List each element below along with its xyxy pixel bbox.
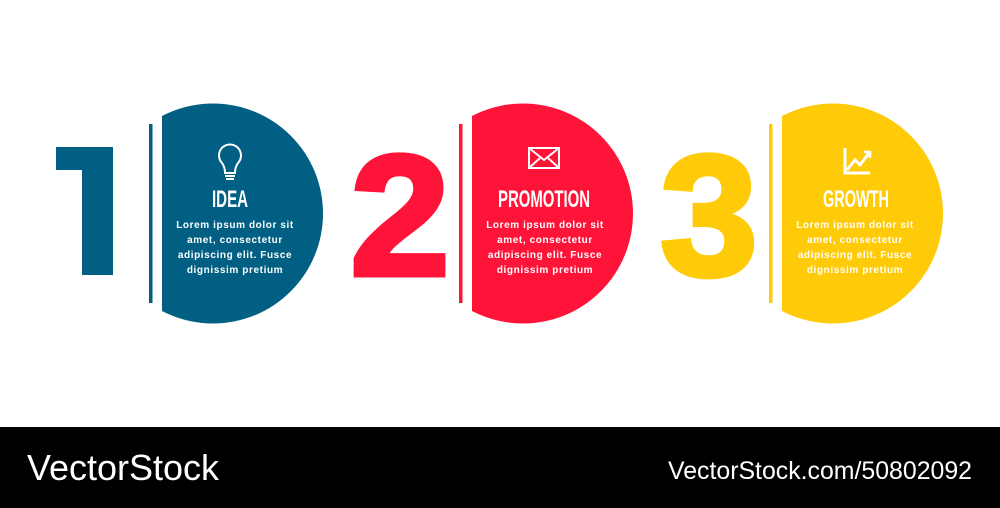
text block 1: Lorem ipsum dolor sit (176, 220, 294, 231)
text block 3: Lorem ipsum dolor sit (796, 220, 914, 231)
text block 1: dignissim pretium (187, 265, 283, 276)
step 2: promotion (350, 104, 633, 324)
circle panel 2 (472, 104, 633, 324)
text block 2: adipiscing elit. Fusce (488, 250, 602, 261)
icon: envelope (529, 148, 559, 168)
footer logo text: VectorStock (27, 447, 220, 488)
circle panel 3 (782, 104, 943, 324)
circle panel 1 (162, 104, 323, 324)
divider bar 3 (769, 124, 772, 303)
step 1: idea (56, 104, 323, 324)
number 3: 3 (660, 120, 758, 312)
step 3: growth (660, 104, 943, 324)
text block 1 (176, 220, 294, 276)
text block 2 (486, 220, 604, 276)
text block 1: adipiscing elit. Fusce (178, 250, 292, 261)
divider bar 2 (459, 124, 462, 303)
text block 2: Lorem ipsum dolor sit (486, 220, 604, 231)
heading: GROWTH: GROWTH (823, 186, 889, 213)
text block 3 (796, 220, 914, 276)
heading: PROMOTION: PROMOTION (498, 186, 590, 213)
icon: light bulb (219, 144, 241, 179)
number 1 (56, 147, 113, 275)
text block 3: adipiscing elit. Fusce (798, 250, 912, 261)
number 2: 2 (350, 120, 450, 312)
divider bar 1 (149, 124, 152, 303)
heading: IDEA: IDEA (212, 186, 248, 213)
text block 1: amet, consectetur (187, 235, 283, 246)
footer bar (0, 427, 1000, 508)
text block 3: dignissim pretium (807, 265, 903, 276)
footer url: VectorStock.com/50802092 (668, 457, 972, 485)
text block 3: amet, consectetur (807, 235, 903, 246)
text block 2: amet, consectetur (497, 235, 593, 246)
text block 2: dignissim pretium (497, 265, 593, 276)
icon: growth chart (845, 148, 870, 173)
